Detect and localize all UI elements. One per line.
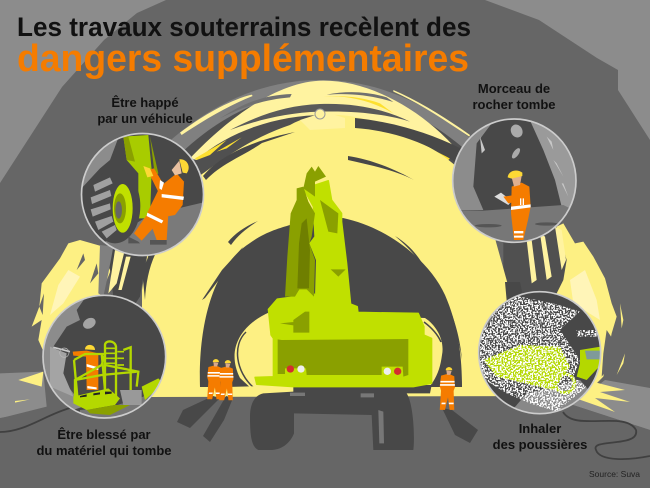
ground [0, 396, 650, 488]
glow ring strokes [238, 322, 441, 387]
circle: dust [477, 290, 603, 417]
excavator wheels and axle [250, 385, 432, 450]
yellow right wall below circle [470, 200, 525, 395]
cables [0, 408, 650, 459]
excavator [255, 166, 432, 387]
shadows of workers [177, 396, 478, 443]
title: dangers supplémentaires [17, 38, 469, 80]
title [17, 12, 471, 80]
right floor wedge [573, 380, 650, 430]
right floor flame [575, 381, 630, 412]
ground glow streak [150, 386, 560, 397]
tunnel arch band [128, 80, 525, 395]
inner tunnel [200, 218, 462, 387]
label: falling rock: rocher tombe [472, 97, 556, 112]
workers in tunnel [207, 359, 455, 410]
pale lens and lamp [300, 109, 345, 130]
light streaks at arch crown [180, 81, 470, 163]
circle: falling material [42, 293, 168, 420]
left side flames [0, 240, 147, 418]
main yellow glow [142, 115, 522, 395]
label: dust: Inhaler [519, 421, 561, 436]
dark stripes near right wall [505, 282, 530, 395]
label: falling rock: Morceau de [478, 81, 550, 96]
label: dust: des poussières [493, 437, 587, 452]
right side flames [503, 223, 625, 400]
source: Source: Suva [589, 469, 640, 479]
glow behind excavator [235, 312, 443, 392]
label: falling material: Être blessé par [57, 427, 151, 442]
label: hit by vehicle: par un véhicule [97, 111, 193, 126]
label: hit by vehicle: Être happé [111, 95, 179, 110]
circle: hit by vehicle [80, 132, 207, 258]
title: Les travaux souterrains recèlent des [17, 12, 471, 42]
dark strokes on yellow [142, 118, 478, 360]
label: falling material: du matériel qui tombe [36, 443, 172, 458]
circle: falling rock [450, 117, 580, 247]
